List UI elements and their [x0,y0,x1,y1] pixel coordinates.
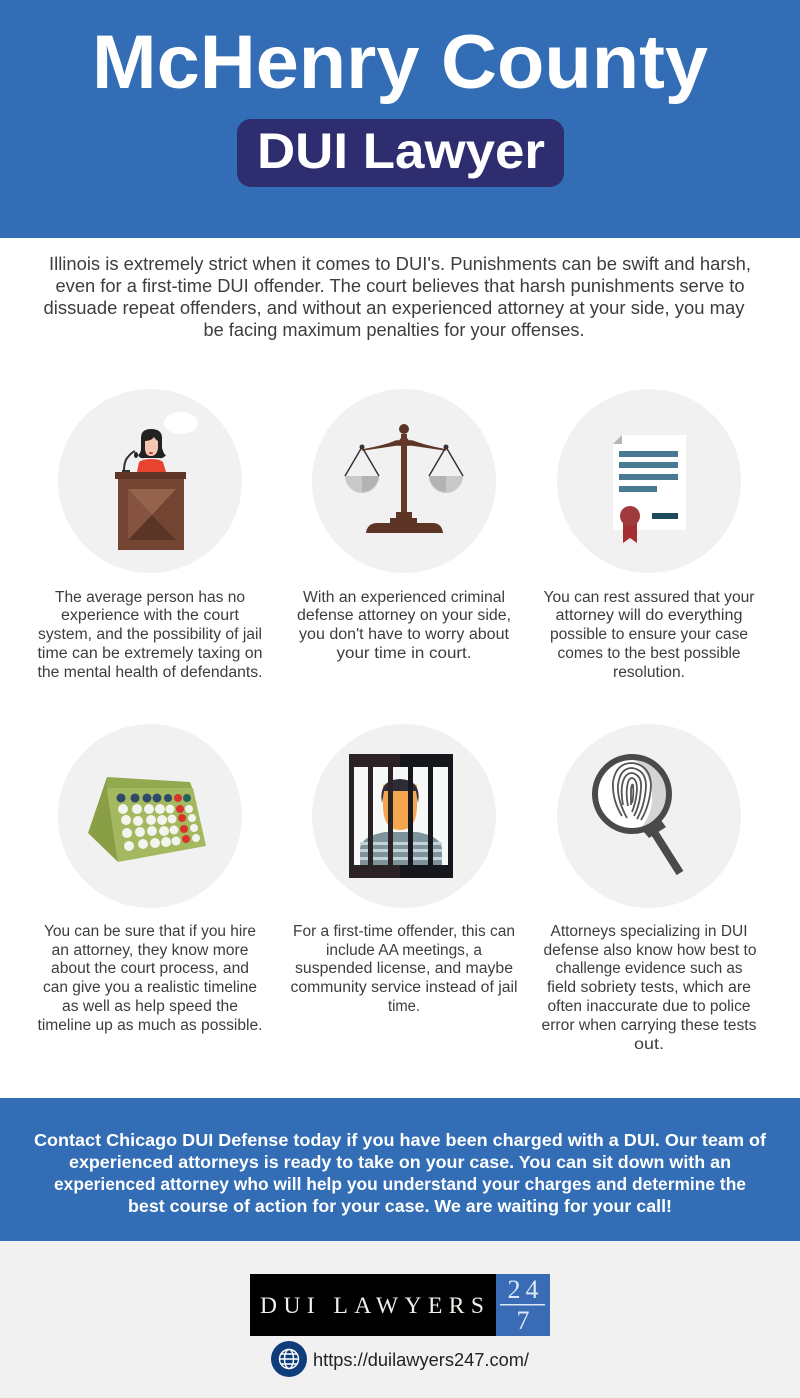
intro paragraph: Illinois is extremely strict when it comes to DUI's. Punishments can be swift and harsh, [49,253,751,274]
text: best resolution: You can rest assured that your [544,589,754,606]
text: challenge evidence: error when carrying these tests [542,1017,757,1034]
subtitle badge [237,119,564,187]
text: first-time offender: For a first-time offender, this can [293,923,515,940]
intro paragraph: even for a first-time DUI offender. The court believes that harsh punishments serve to [56,275,744,296]
text: first-time offender: time. [388,998,420,1015]
text: challenge evidence: often inaccurate due to police [548,998,750,1015]
call to action band [0,1098,800,1241]
text: realistic timeline: an attorney, they know more [52,942,248,959]
header band [0,0,800,238]
text: best resolution: possible to ensure your case [550,626,748,643]
footer band [0,1241,800,1398]
icon: desk calendar [58,724,242,908]
text: challenge evidence: field sobriety tests, which are [547,979,751,996]
text: realistic timeline: You can be sure that if you hire [44,923,256,940]
text: time in court: you don't have to worry about [299,626,510,643]
text: first-time offender [290,923,518,1015]
text: first-time offender: suspended license, and maybe [295,960,513,977]
website url: https://duilawyers247.com/ [313,1349,530,1370]
logo: 24 [508,1275,538,1304]
text: time in court: your time in court. [336,645,472,662]
panel: podium speaker [38,389,262,681]
text: challenge evidence: out. [634,1036,664,1053]
panel: scales [297,389,511,662]
text: court system [38,589,262,681]
logo: 7 [516,1306,530,1335]
call to action band: Contact Chicago DUI Defense today if you have been charged with a DUI. Our team of [34,1130,766,1150]
text: challenge evidence: challenge evidence such as [556,960,743,977]
text: challenge evidence: Attorneys specializing in DUI [550,923,748,940]
text: court system: the mental health of defendants. [38,664,262,681]
text: realistic timeline [38,923,262,1034]
text: time in court: defense attorney on your side, [297,607,511,624]
text: challenge evidence: defense also know how best to [544,942,756,959]
text: time in court [297,589,511,662]
text: time in court: With an experienced criminal [303,589,505,606]
text: realistic timeline: can give you a realistic timeline [43,979,257,996]
logo: DUI LAWYERS [260,1293,484,1319]
intro paragraph: be facing maximum penalties for your offenses. [204,319,584,340]
text: best resolution [544,589,754,681]
text: first-time offender: include AA meetings, a [326,942,482,959]
text: court system: The average person has no [55,589,245,606]
text: best resolution: attorney will do everything [556,607,742,624]
panel: jail [290,724,518,1015]
call to action band: experienced attorneys is ready to take on your case. You can sit down with an [69,1152,731,1172]
text: court system: system, and the possibility of jail [38,626,262,643]
icon: balance scales [312,389,496,573]
icon: certificate document [557,389,741,573]
call to action band: experienced attorney who will help you understand your charges and determine the [54,1174,746,1194]
panel: document [544,389,754,681]
subtitle badge: DUI Lawyer [257,123,545,179]
text: court system: experience with the court [61,607,240,624]
text: best resolution: resolution. [613,664,685,681]
text: best resolution: comes to the best possible [558,645,740,662]
icon: prisoner behind bars [312,724,496,908]
call to action band: best course of action for your case. We are waiting for your call! [128,1196,672,1216]
logo [250,1274,550,1336]
text: first-time offender: community service instead of jail [290,979,518,996]
text: realistic timeline: as well as help speed the [62,998,238,1015]
intro paragraph: dissuade repeat offenders, and without an experienced attorney at your side, you may [44,297,745,318]
text: realistic timeline: about the court process, and [51,960,249,977]
text: court system: time can be extremely taxing on [38,645,262,662]
panel: calendar [38,724,262,1034]
text: realistic timeline: timeline up as much as possible. [38,1017,262,1034]
icon: woman at podium [58,389,242,573]
icon: magnifier over fingerprint [557,724,741,908]
icon: globe [271,1341,307,1377]
intro paragraph [44,253,751,340]
text: challenge evidence [542,923,757,1053]
title: McHenry County [92,20,708,105]
panel: evidence [542,724,757,1053]
